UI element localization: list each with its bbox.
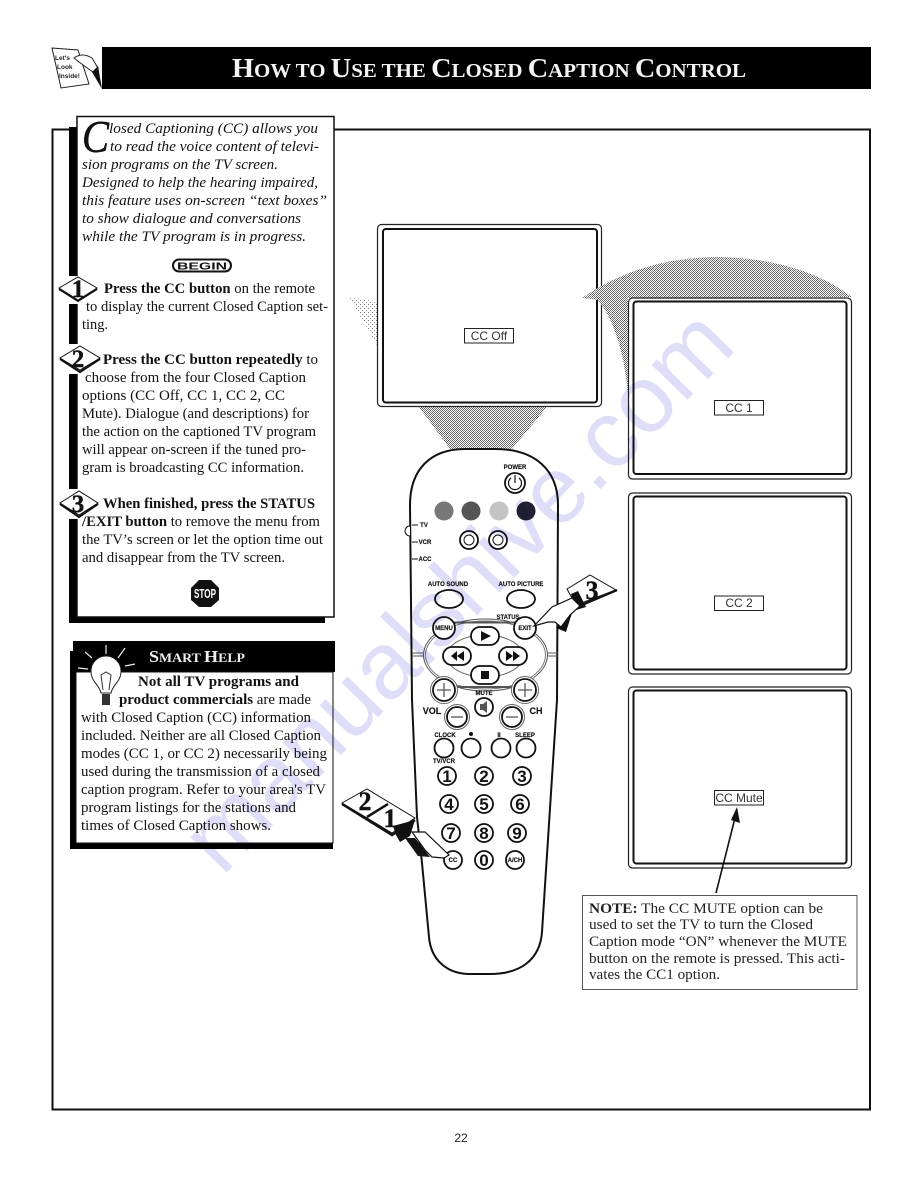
begin badge: BEGIN <box>177 262 227 272</box>
icon: let's look inside hand: Inside! <box>59 73 80 80</box>
pointer hand: step 3 <box>534 575 617 632</box>
pointer hand: steps 1 and 2: 1 <box>384 804 396 833</box>
number keypad: 4 <box>444 795 454 814</box>
step 1 text: Press the CC button on the remote <box>104 281 315 297</box>
step 2 marker <box>60 346 100 373</box>
mode switch labels: ACC <box>418 557 432 563</box>
icon: let's look inside hand: Look <box>57 64 73 71</box>
arrow: note to CC Mute <box>716 807 740 893</box>
remote control <box>405 449 558 974</box>
smart help text: Not all TV programs and <box>138 674 299 690</box>
auto buttons <box>428 582 543 608</box>
smart help text: modes (CC 1, or CC 2) necessarily being <box>81 746 327 762</box>
number keypad: 1 <box>442 767 452 786</box>
begin badge <box>173 260 231 272</box>
light beams from remote to first tv <box>349 297 547 449</box>
smart help text: caption program. Refer to your area's TV <box>81 782 327 798</box>
intro text <box>81 121 327 245</box>
volume, channel and mute: MUTE <box>476 691 492 697</box>
panel: smart help <box>70 641 335 849</box>
number keypad: 2 <box>479 767 489 786</box>
step 2 text: choose from the four Closed Caption <box>85 370 307 386</box>
step 2 text: Mute). Dialogue (and descriptions) for <box>82 406 309 422</box>
smart help text: included. Neither are all Closed Caption <box>81 728 322 744</box>
smiley buttons <box>460 531 507 549</box>
volume, channel and mute: CH <box>530 706 542 716</box>
step 2 text <box>82 352 318 476</box>
remote body <box>410 449 558 974</box>
transport pad: EXIT <box>518 626 532 632</box>
number keypad <box>438 767 531 870</box>
step 1 marker <box>59 276 97 303</box>
step 3 text: the TV’s screen or let the option time out <box>82 532 323 548</box>
light beam across to cc screens <box>582 257 852 395</box>
callout: note: NOTE: The CC MUTE option can be <box>589 901 823 917</box>
number keypad: CC <box>449 858 458 864</box>
step 3 text: and disappear from the TV screen. <box>82 550 285 566</box>
pointer hand: step 3: 3 <box>586 576 598 605</box>
panel: introduction and steps <box>59 112 334 623</box>
tv screen: CC 1: CC 1 <box>725 401 753 415</box>
power button <box>504 465 527 493</box>
intro text: to show dialogue and conversations <box>82 211 301 227</box>
number keypad: 6 <box>515 795 525 814</box>
callout: note <box>582 896 857 990</box>
smart help text: used during the transmission of a closed <box>81 764 321 780</box>
color buttons <box>434 502 536 520</box>
number keypad: A/CH <box>508 858 522 864</box>
intro text: while the TV program is in progress. <box>82 229 306 245</box>
step 2 text: the action on the captioned TV program <box>82 424 317 440</box>
title banner <box>102 47 871 89</box>
callout: note: Caption mode “ON” whenever the MUTE <box>589 934 847 950</box>
step 1 text: ting. <box>82 317 108 333</box>
clock row <box>433 732 536 765</box>
smart help text: program listings for the stations and <box>81 800 297 816</box>
icon: let's look inside hand <box>52 48 102 89</box>
smart help heading: SMART HELP <box>149 647 245 666</box>
pointer hand: steps 1 and 2 <box>342 787 449 858</box>
tv screen: CC 2: CC 2 <box>725 596 753 610</box>
smart help text: times of Closed Caption shows. <box>81 818 271 834</box>
transport pad: MENU <box>435 626 453 632</box>
mode switch labels: TV <box>420 523 428 529</box>
tv screen: CC Mute: CC Mute <box>715 791 763 805</box>
intro text: this feature uses on-screen “text boxes” <box>82 193 327 209</box>
clock row: SLEEP <box>515 733 535 739</box>
step 2 text: options (CC Off, CC 1, CC 2, CC <box>82 388 285 404</box>
number keypad: 0 <box>479 851 489 870</box>
step 3 text: /EXIT button to remove the menu from <box>81 514 321 530</box>
pointer hand: steps 1 and 2: 2 <box>358 787 372 816</box>
smart help text: with Closed Caption (CC) information <box>81 710 312 726</box>
tv screen: CC Mute <box>628 687 852 868</box>
icon: stop sign: STOP <box>194 586 216 601</box>
icon: stop sign <box>191 580 219 607</box>
number keypad: 3 <box>517 767 527 786</box>
page number: 22 <box>454 1131 468 1145</box>
intro text: losed Captioning (CC) allows you <box>109 121 318 137</box>
intro text: to read the voice content of televi- <box>110 139 319 155</box>
icon: let's look inside hand: Let's <box>55 55 70 62</box>
auto buttons: AUTO PICTURE <box>499 582 543 588</box>
step 3 text <box>81 496 323 566</box>
clock row: CLOCK <box>434 733 456 739</box>
transport pad <box>412 615 558 691</box>
icon: light bulb <box>78 645 135 705</box>
step 2 text: will appear on-screen if the tuned pro- <box>82 442 306 458</box>
step 3 marker <box>60 491 98 518</box>
power button: POWER <box>504 465 527 471</box>
step 2 text: gram is broadcasting CC information. <box>82 460 304 476</box>
clock row: TV/VCR <box>433 759 456 765</box>
auto buttons: AUTO SOUND <box>428 582 469 588</box>
step 2 text: Press the CC button repeatedly to <box>103 352 318 368</box>
main frame <box>52 130 870 1110</box>
smart help text: product commercials are made <box>119 692 311 708</box>
step 2 marker: 2 <box>72 346 84 373</box>
step 1 marker: 1 <box>72 276 84 303</box>
callout: note: button on the remote is pressed. This acti- <box>589 951 845 967</box>
drop cap: C <box>82 112 110 162</box>
mode switch labels: VCR <box>419 540 432 546</box>
number keypad: 5 <box>479 795 489 814</box>
intro text: sion programs on the TV screen. <box>82 157 278 173</box>
callout: note: used to set the TV to turn the Closed <box>589 917 814 933</box>
tv screen: CC Off <box>378 224 602 406</box>
tv screen: CC 1 <box>628 298 852 479</box>
step 3 marker: 3 <box>72 491 84 518</box>
intro text: Designed to help the hearing impaired, <box>81 175 318 191</box>
number keypad: 8 <box>479 824 489 843</box>
number keypad: 7 <box>446 824 456 843</box>
watermark: manualshive.com <box>161 289 753 892</box>
callout: note: vates the CC1 option. <box>589 967 720 983</box>
tv screen: CC Off: CC Off <box>471 329 508 343</box>
smart help text <box>81 674 327 834</box>
mode switch labels <box>405 523 432 563</box>
number keypad: 9 <box>512 824 522 843</box>
step 1 text <box>82 281 328 333</box>
transport pad: STATUS <box>496 615 520 621</box>
title banner: HOW TO USE THE CLOSED CAPTION CONTROL <box>232 53 746 83</box>
volume, channel and mute <box>423 676 542 730</box>
volume, channel and mute: VOL <box>423 706 442 716</box>
step 1 text: to display the current Closed Caption set- <box>86 299 328 315</box>
tv screen: CC 2 <box>628 493 852 674</box>
step 3 text: When finished, press the STATUS <box>103 496 315 512</box>
clock row: II <box>497 733 501 739</box>
